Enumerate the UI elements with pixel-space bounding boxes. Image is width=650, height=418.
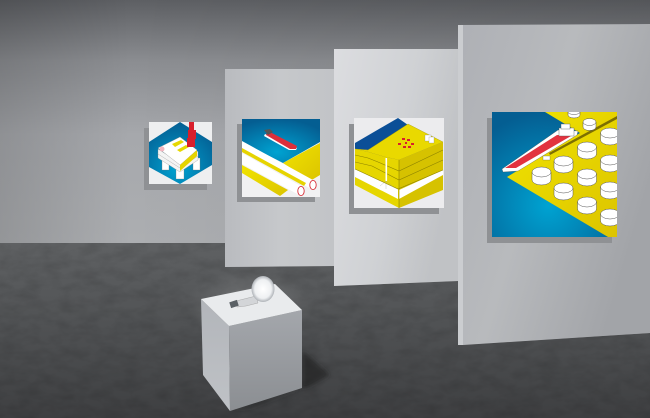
back wall (0, 0, 650, 245)
pedestal shadow (230, 350, 330, 411)
floor (0, 243, 650, 418)
lower pipe (242, 153, 301, 196)
wall: middle partition (334, 49, 458, 286)
light glow on floor (185, 270, 315, 340)
artwork 3: geological block (349, 118, 444, 214)
lower yellow band (242, 165, 288, 196)
red dots triangle (398, 138, 414, 148)
wall: right partition (458, 24, 650, 345)
light bulb (229, 276, 274, 308)
tanker (502, 130, 578, 172)
well (386, 158, 387, 181)
artwork 1: oil platform (144, 122, 212, 190)
storage tanks (532, 110, 620, 226)
upper pipe (242, 141, 313, 190)
pedestal (201, 284, 302, 411)
pipeline (549, 116, 617, 155)
yellow stripe (242, 148, 306, 186)
stacked platform layers (158, 149, 198, 172)
red derrick (187, 122, 196, 147)
wall: left partition (225, 69, 334, 267)
artwork 4: tanker and storage tanks (487, 110, 620, 243)
ship (264, 134, 297, 150)
artwork 2: ship and pipelines (237, 119, 320, 202)
platform legs (162, 158, 200, 179)
platform deck (158, 137, 197, 165)
